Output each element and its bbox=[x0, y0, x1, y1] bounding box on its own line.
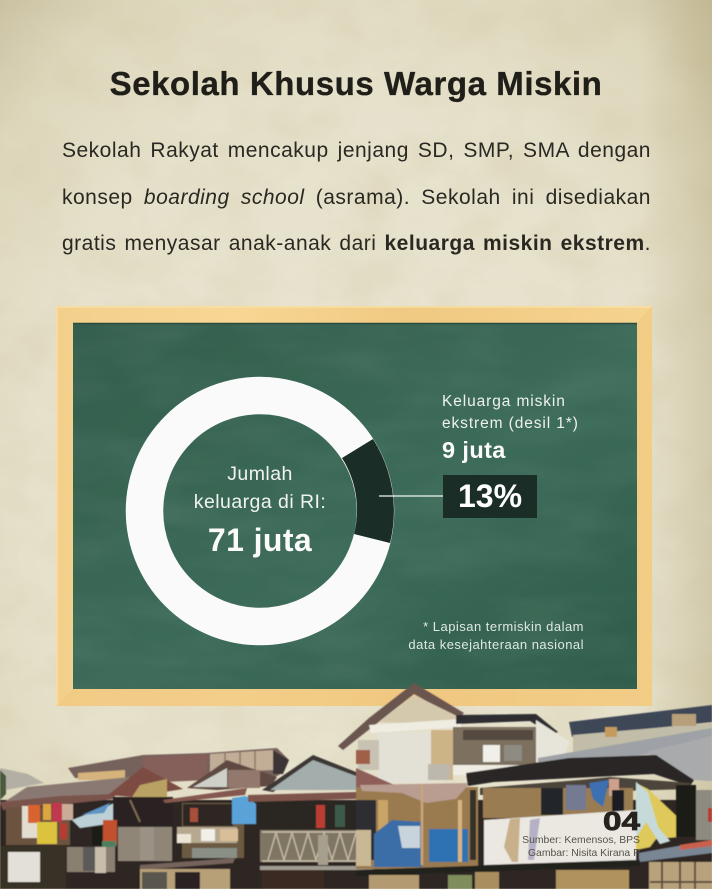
center lower section with blue tarps bbox=[356, 783, 478, 869]
donut center label bbox=[194, 463, 326, 513]
extreme poverty label bbox=[442, 393, 579, 432]
intro text: gratis menyasar anak-anak dari keluarga miskin ekstrem. bbox=[62, 232, 651, 255]
right house with laundry bbox=[483, 779, 712, 889]
right back buildings bbox=[538, 705, 712, 781]
source credit bbox=[522, 835, 640, 858]
donut center label: keluarga di RI: bbox=[194, 491, 326, 513]
footnote: data kesejahteraan nasional bbox=[408, 636, 584, 652]
page number: 04 bbox=[603, 806, 640, 836]
base shadow bbox=[0, 800, 712, 889]
donut chart bbox=[144, 396, 394, 626]
bottom strip bbox=[356, 860, 640, 889]
percent box bbox=[443, 475, 537, 518]
third house bbox=[163, 760, 277, 858]
connector line bbox=[379, 495, 443, 497]
tall center house bbox=[338, 683, 570, 789]
source credit: Sumber: Kemensos, BPS bbox=[522, 835, 640, 846]
title: Sekolah Khusus Warga Miskin bbox=[110, 65, 602, 102]
second house bbox=[92, 767, 235, 889]
donut center value: 71 juta bbox=[208, 522, 312, 558]
intro text: Sekolah Rakyat mencakup jenjang SD, SMP, SMA dengan bbox=[62, 139, 651, 162]
big dark roof bbox=[466, 755, 694, 795]
intro text bbox=[62, 139, 651, 255]
extreme poverty label: ekstrem (desil 1*) bbox=[442, 414, 579, 432]
footnote: * Lapisan termiskin dalam bbox=[423, 619, 584, 634]
back roofs and far left bbox=[0, 748, 289, 800]
source credit: Gambar: Nisita Kirana P bbox=[528, 848, 640, 858]
percent value: 13% bbox=[458, 478, 522, 514]
donut center label: Jumlah bbox=[227, 463, 293, 485]
footnote bbox=[408, 619, 584, 652]
extreme poverty value: 9 juta bbox=[442, 437, 506, 463]
intro text: konsep boarding school (asrama). Sekolah ini disediakan bbox=[62, 186, 651, 209]
wooden frame bbox=[56, 306, 652, 706]
left house with clothes bbox=[0, 777, 130, 889]
fourth house bbox=[248, 755, 374, 889]
extreme poverty label: Keluarga miskin bbox=[442, 393, 566, 410]
board surface bbox=[73, 323, 637, 689]
